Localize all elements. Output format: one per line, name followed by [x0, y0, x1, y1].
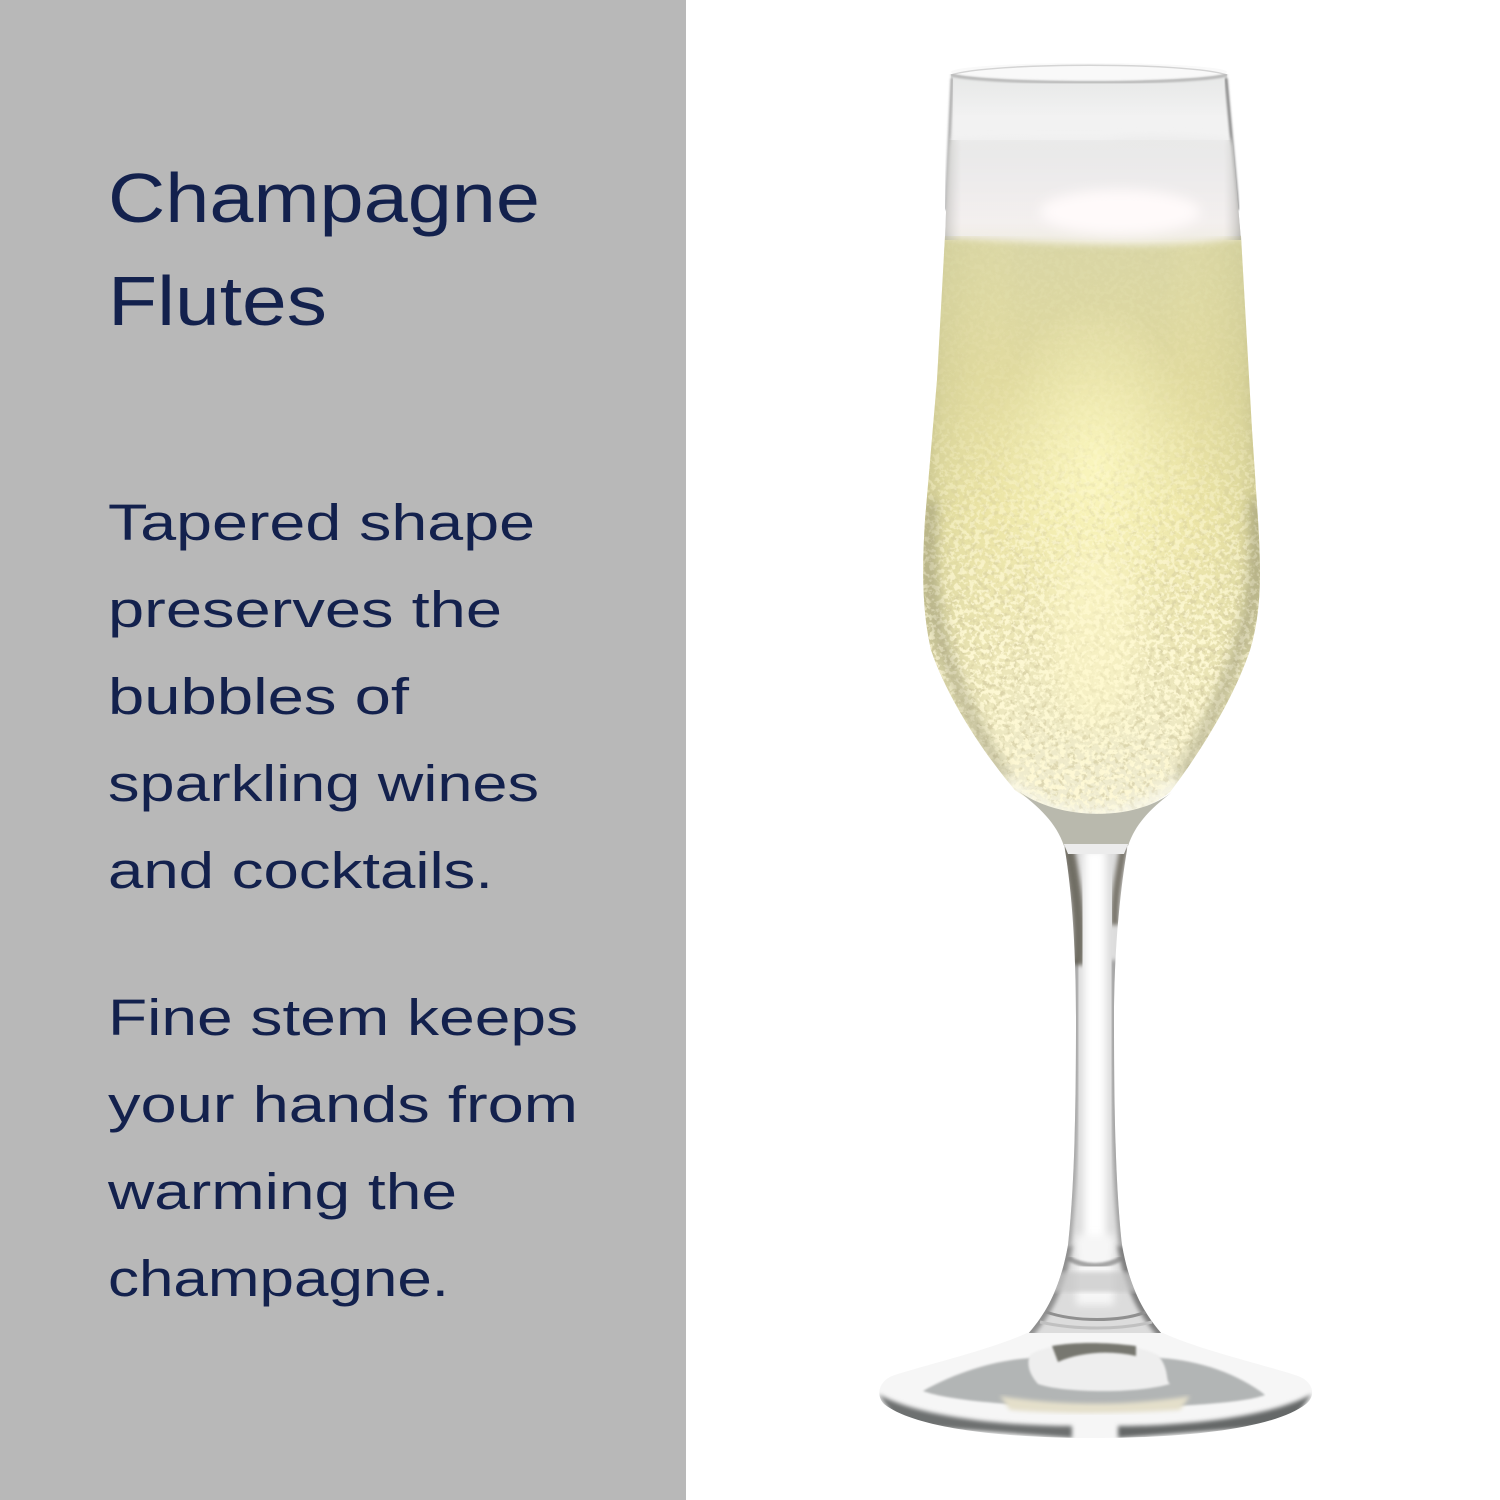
- foam: [940, 136, 1245, 245]
- wine body: [923, 236, 1260, 814]
- text block: tapered shape: [108, 494, 539, 899]
- text block: fine stem: warming the: [107, 1163, 457, 1220]
- glass bowl: empty upper part: [940, 60, 1245, 255]
- foot: [870, 1330, 1320, 1440]
- text block: tapered shape: bubbles of: [108, 668, 410, 725]
- heading: Champagne Flutes: Champagne: [108, 159, 540, 237]
- text block: fine stem: your hands from: [108, 1076, 578, 1133]
- glass base of bowl: [1013, 787, 1172, 846]
- text block: fine stem: champagne.: [108, 1250, 449, 1307]
- heading: Champagne Flutes: Flutes: [108, 262, 327, 340]
- stem: [1028, 844, 1162, 1333]
- text block: tapered shape: sparkling wines: [108, 755, 539, 812]
- text block: tapered shape: Tapered shape: [108, 494, 535, 551]
- illustration: champagne flute: [870, 60, 1320, 1440]
- glass rim: [946, 63, 1238, 210]
- panel: grey text column: [0, 0, 686, 1500]
- text block: tapered shape: preserves the: [108, 581, 502, 638]
- text block: tapered shape: and cocktails.: [108, 842, 493, 899]
- text block: fine stem: Fine stem keeps: [108, 989, 578, 1046]
- heading: Champagne Flutes: [108, 159, 540, 340]
- text block: fine stem: [107, 989, 578, 1307]
